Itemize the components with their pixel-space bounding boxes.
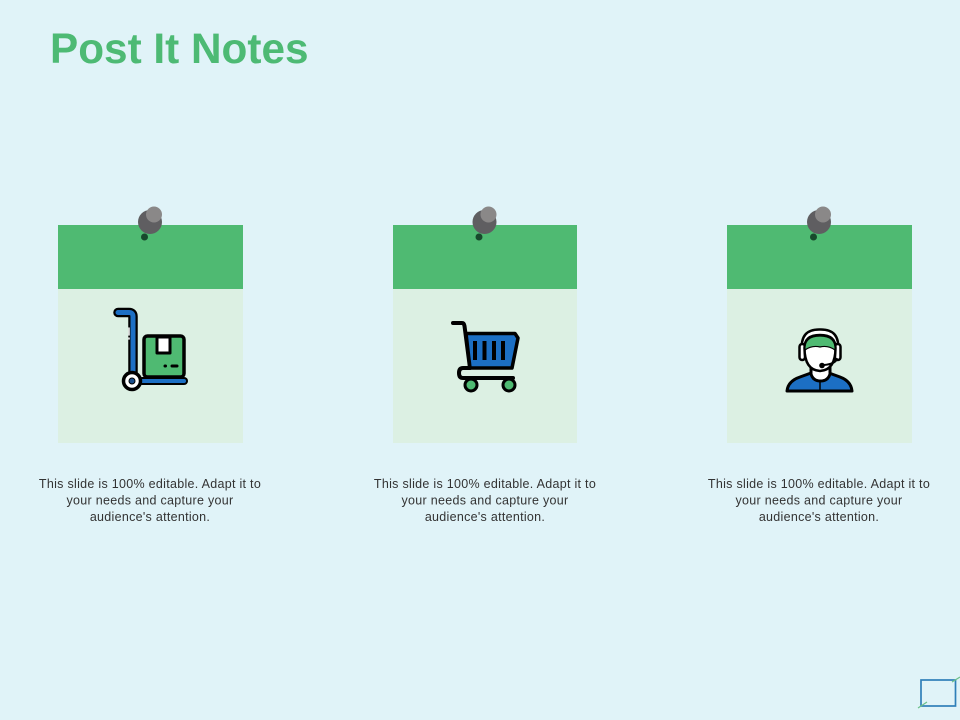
icon: shopping cart bbox=[453, 323, 518, 391]
note 2 body bbox=[393, 289, 577, 443]
note 1 text: This slide is 100% editable. Adapt it to bbox=[39, 477, 261, 491]
panel: note 2 bbox=[374, 206, 596, 524]
note 3 text: your needs and capture your bbox=[736, 494, 902, 508]
note 1 text: your needs and capture your bbox=[67, 494, 233, 508]
note 3 header bbox=[727, 225, 912, 289]
note 2 text: audience's attention. bbox=[425, 510, 545, 524]
pin 3 bbox=[807, 206, 831, 240]
note 1 body bbox=[58, 289, 243, 443]
panel: note 3 bbox=[708, 206, 930, 524]
note 1 text: audience's attention. bbox=[90, 510, 210, 524]
panel: note 1 bbox=[39, 206, 261, 524]
icon: support agent bbox=[787, 329, 852, 391]
note 3 text: audience's attention. bbox=[759, 510, 879, 524]
pin 1 bbox=[138, 206, 162, 240]
note 3 text: This slide is 100% editable. Adapt it to bbox=[708, 477, 930, 491]
note 2 text: This slide is 100% editable. Adapt it to bbox=[374, 477, 596, 491]
icon: hand truck with box bbox=[118, 312, 184, 390]
corner logo frame bbox=[918, 677, 960, 708]
note 2 header bbox=[393, 225, 577, 289]
title: Post It Notes bbox=[50, 25, 309, 72]
note 3 body bbox=[727, 289, 912, 443]
note 1 header bbox=[58, 225, 243, 289]
pin 2 bbox=[472, 206, 496, 240]
note 2 text: your needs and capture your bbox=[402, 494, 568, 508]
